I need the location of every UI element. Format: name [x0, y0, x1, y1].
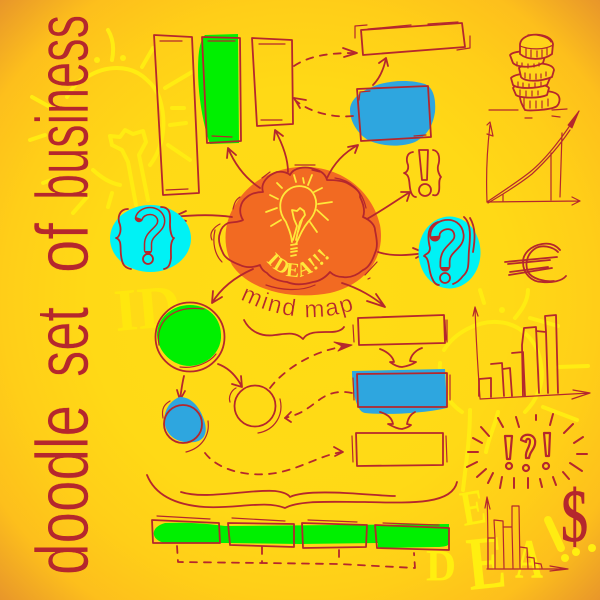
arrow: blue band to bottom box — [380, 412, 415, 429]
ground lines — [489, 109, 567, 118]
icon: coin stack — [510, 35, 560, 110]
label: mind map — [242, 288, 352, 318]
background doodle: pale light bulb left — [30, 30, 192, 213]
label: IDEA — [266, 248, 337, 277]
panel: empty circle — [229, 386, 281, 433]
bar chart peak — [485, 497, 568, 571]
panel: green timeline — [152, 516, 449, 568]
burst: !?! — [467, 414, 587, 488]
arrow: dashed to top box — [294, 48, 357, 66]
panel: tall empty column — [154, 35, 199, 195]
background doodle: pale exclamations — [548, 520, 596, 562]
vertical title: of — [21, 223, 104, 273]
segment boxes — [152, 520, 220, 543]
panel: central idea cloud: IDEA!!! — [266, 248, 329, 278]
brace under mind map — [244, 320, 344, 339]
panel: blue circle — [162, 397, 208, 452]
background doodle: pale word IDEA right: E — [456, 478, 490, 537]
vertical title: doodle — [21, 405, 104, 575]
arrow: green circle to empty circle — [218, 364, 242, 387]
cloud outline — [219, 168, 377, 284]
arrow: cloud to mind map box — [342, 283, 385, 307]
arrow: cloud to left question — [173, 211, 232, 221]
vertical title — [21, 15, 104, 575]
background doodle: pale light bulb right — [440, 290, 588, 490]
arrow: blue box to top box — [373, 58, 388, 85]
dashed connectors — [177, 546, 415, 568]
panel: bottom box — [352, 433, 447, 466]
bar chart rising — [473, 307, 590, 399]
icon: right question in braces — [418, 216, 480, 288]
arrow: dashed blue circle to bottom box — [205, 447, 343, 474]
arrow: cloud to right question — [378, 248, 425, 258]
panel: top right box — [355, 22, 470, 55]
vertical title: set — [21, 307, 104, 377]
label: mind map: mind map — [242, 288, 352, 318]
big double brace — [147, 475, 457, 508]
arrow: dashed empty circle to box one — [270, 342, 352, 388]
arrow: box one to blue band — [380, 348, 422, 367]
line chart — [487, 111, 580, 205]
arrow: cloud to green column — [227, 148, 260, 188]
icon: euro — [505, 244, 566, 282]
arrow: green circle to blue circle — [177, 376, 185, 400]
background doodle: pale word IDEA left: ID — [111, 272, 184, 344]
panel: box one — [353, 315, 447, 345]
icon: dollar: $ — [561, 476, 588, 558]
panel: blue band — [352, 369, 450, 414]
arrow: cloud to short column — [274, 130, 288, 172]
panel: short empty column — [252, 38, 293, 126]
icon: exclamation in braces — [404, 150, 441, 197]
arrow: cloud to blue box — [327, 145, 358, 178]
background doodle: pale word IDEA right — [426, 478, 543, 600]
panel: green column — [198, 34, 241, 144]
arrow: cloud to exclamation — [367, 192, 410, 219]
arrow: cloud to green circle — [212, 269, 253, 303]
background doodle: pale word IDEA right: D — [426, 541, 456, 590]
arrow: dashed blue box to short column — [294, 98, 353, 116]
icon: left question in braces — [110, 205, 191, 272]
panel: green circle — [156, 302, 224, 372]
icon: light bulb — [266, 175, 332, 256]
panel: blue box — [350, 81, 435, 146]
background doodle: pale word IDEA right: A — [515, 529, 543, 591]
arrow: dashed blue box to empty circle — [285, 392, 352, 422]
panel: central idea cloud — [210, 164, 381, 296]
